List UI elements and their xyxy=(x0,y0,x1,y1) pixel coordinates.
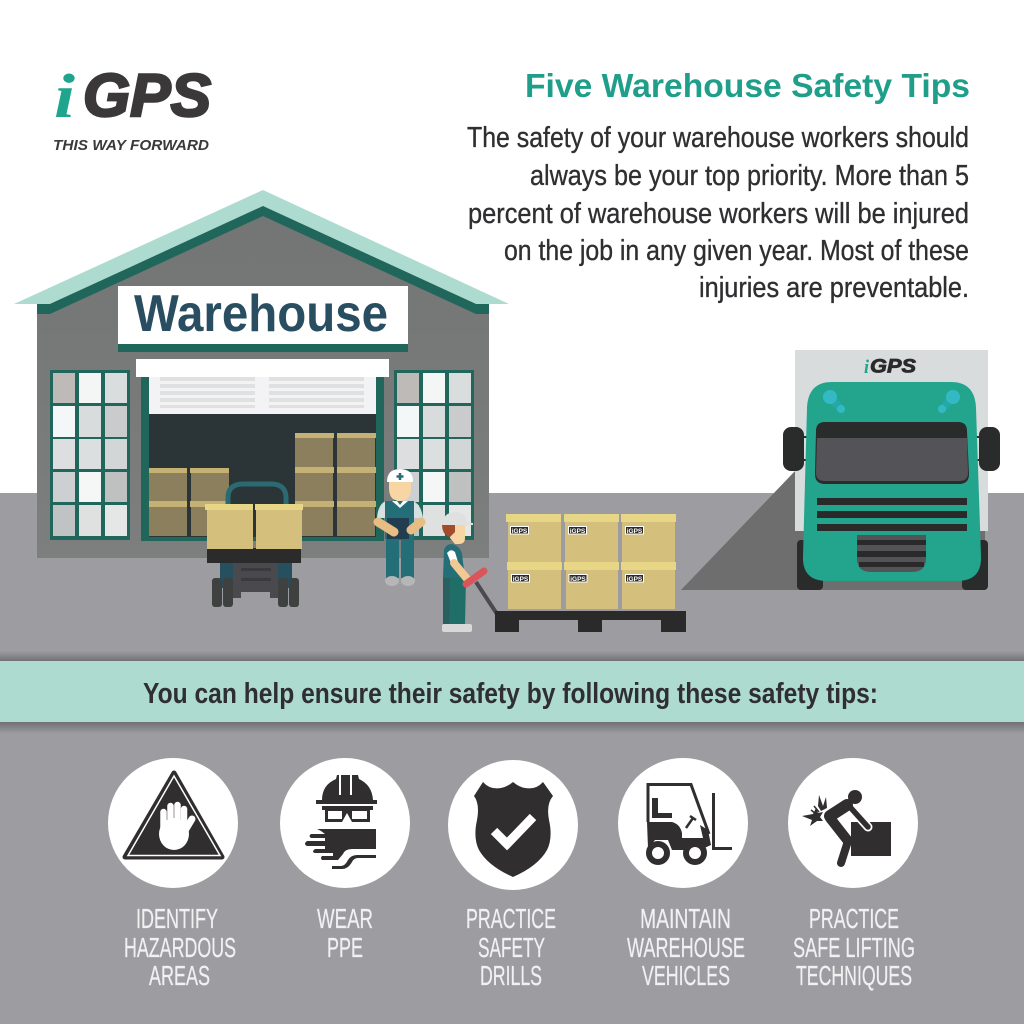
headlights xyxy=(823,390,960,413)
sign: Warehouse xyxy=(134,285,388,343)
mirrors xyxy=(800,437,985,460)
worker with clipboard xyxy=(377,469,423,586)
door interior xyxy=(149,414,376,537)
icon: shield with check xyxy=(448,760,578,890)
back boxes xyxy=(149,433,376,536)
box labels: iGPS xyxy=(627,576,643,583)
cab xyxy=(803,382,981,581)
label xyxy=(793,903,915,991)
box labels: iGPS xyxy=(513,576,529,583)
title: Five Warehouse Safety Tips xyxy=(525,67,970,104)
label: PRACTICE xyxy=(809,903,899,934)
logo: iGPS: i xyxy=(54,63,75,131)
label: IDENTIFY xyxy=(136,903,218,934)
left window xyxy=(50,370,130,540)
tip 5: safe lifting xyxy=(788,758,918,991)
tip 4: warehouse vehicles xyxy=(618,758,748,991)
intro text block: percent of warehouse workers will be injured xyxy=(468,198,969,230)
awning xyxy=(136,359,389,377)
jack handle xyxy=(476,582,497,614)
pallet base xyxy=(495,611,686,632)
truck xyxy=(681,350,1000,590)
box labels xyxy=(510,526,644,583)
tip 2: wear PPE xyxy=(280,758,410,963)
label: HAZARDOUS xyxy=(124,932,236,963)
label: AREAS xyxy=(149,960,210,991)
banner xyxy=(0,661,1024,722)
warehouse building xyxy=(14,190,509,558)
warehouse wall xyxy=(37,207,489,558)
label: DRILLS xyxy=(480,960,542,991)
label xyxy=(466,903,556,991)
label: TECHNIQUES xyxy=(796,960,912,991)
intro text block xyxy=(467,122,969,304)
icon: hard hat, goggles, glove xyxy=(280,758,410,888)
tip 3: safety drills xyxy=(448,760,578,991)
banner shadow xyxy=(0,651,1024,734)
label: SAFETY xyxy=(478,932,545,963)
box labels: iGPS xyxy=(512,528,528,535)
pallet jack with boxes xyxy=(205,484,303,607)
roof dark band xyxy=(37,206,489,314)
label xyxy=(627,903,745,991)
label: VEHICLES xyxy=(642,960,730,991)
label: SAFE LIFTING xyxy=(793,932,915,963)
worker pulling pallet xyxy=(442,512,484,632)
label: MAINTAIN xyxy=(640,903,731,934)
roof light band xyxy=(14,190,509,304)
logo: iGPS: GPS xyxy=(83,62,211,129)
windshield xyxy=(815,422,969,484)
label: WEAR xyxy=(317,903,373,934)
icon: warning hand xyxy=(108,758,238,888)
icon: person lifting box with back strain xyxy=(788,758,918,888)
label: PRACTICE xyxy=(466,903,556,934)
cardboard boxes xyxy=(508,520,675,609)
box labels: iGPS xyxy=(627,528,643,535)
banner text: You can help ensure their safety by following these safety tips: xyxy=(143,678,878,710)
cargo box xyxy=(795,350,988,531)
logo: iGPS: THIS WAY FORWARD xyxy=(53,137,209,154)
door frame xyxy=(141,375,384,541)
ground xyxy=(0,493,1024,1024)
grille stripes xyxy=(817,498,967,531)
box labels: iGPS xyxy=(570,528,586,535)
shutter xyxy=(149,377,376,414)
logo: iGPS xyxy=(53,62,211,154)
box labels: iGPS xyxy=(570,576,586,583)
bumper vent xyxy=(857,535,926,572)
wheels xyxy=(797,540,823,590)
intro text block: always be your top priority. More than 5 xyxy=(530,160,969,192)
label: WAREHOUSE xyxy=(627,932,745,963)
label: PPE xyxy=(327,932,363,963)
right window xyxy=(394,370,474,540)
truck logo: i xyxy=(864,357,870,378)
intro text block: injuries are preventable. xyxy=(699,272,969,304)
tip 1: hazardous areas xyxy=(108,758,238,991)
truck shadow xyxy=(681,471,985,590)
pallet of boxes xyxy=(476,514,686,632)
label xyxy=(317,903,373,963)
icon: forklift xyxy=(618,758,748,888)
truck logo: GPS xyxy=(870,356,916,378)
label xyxy=(124,903,236,991)
